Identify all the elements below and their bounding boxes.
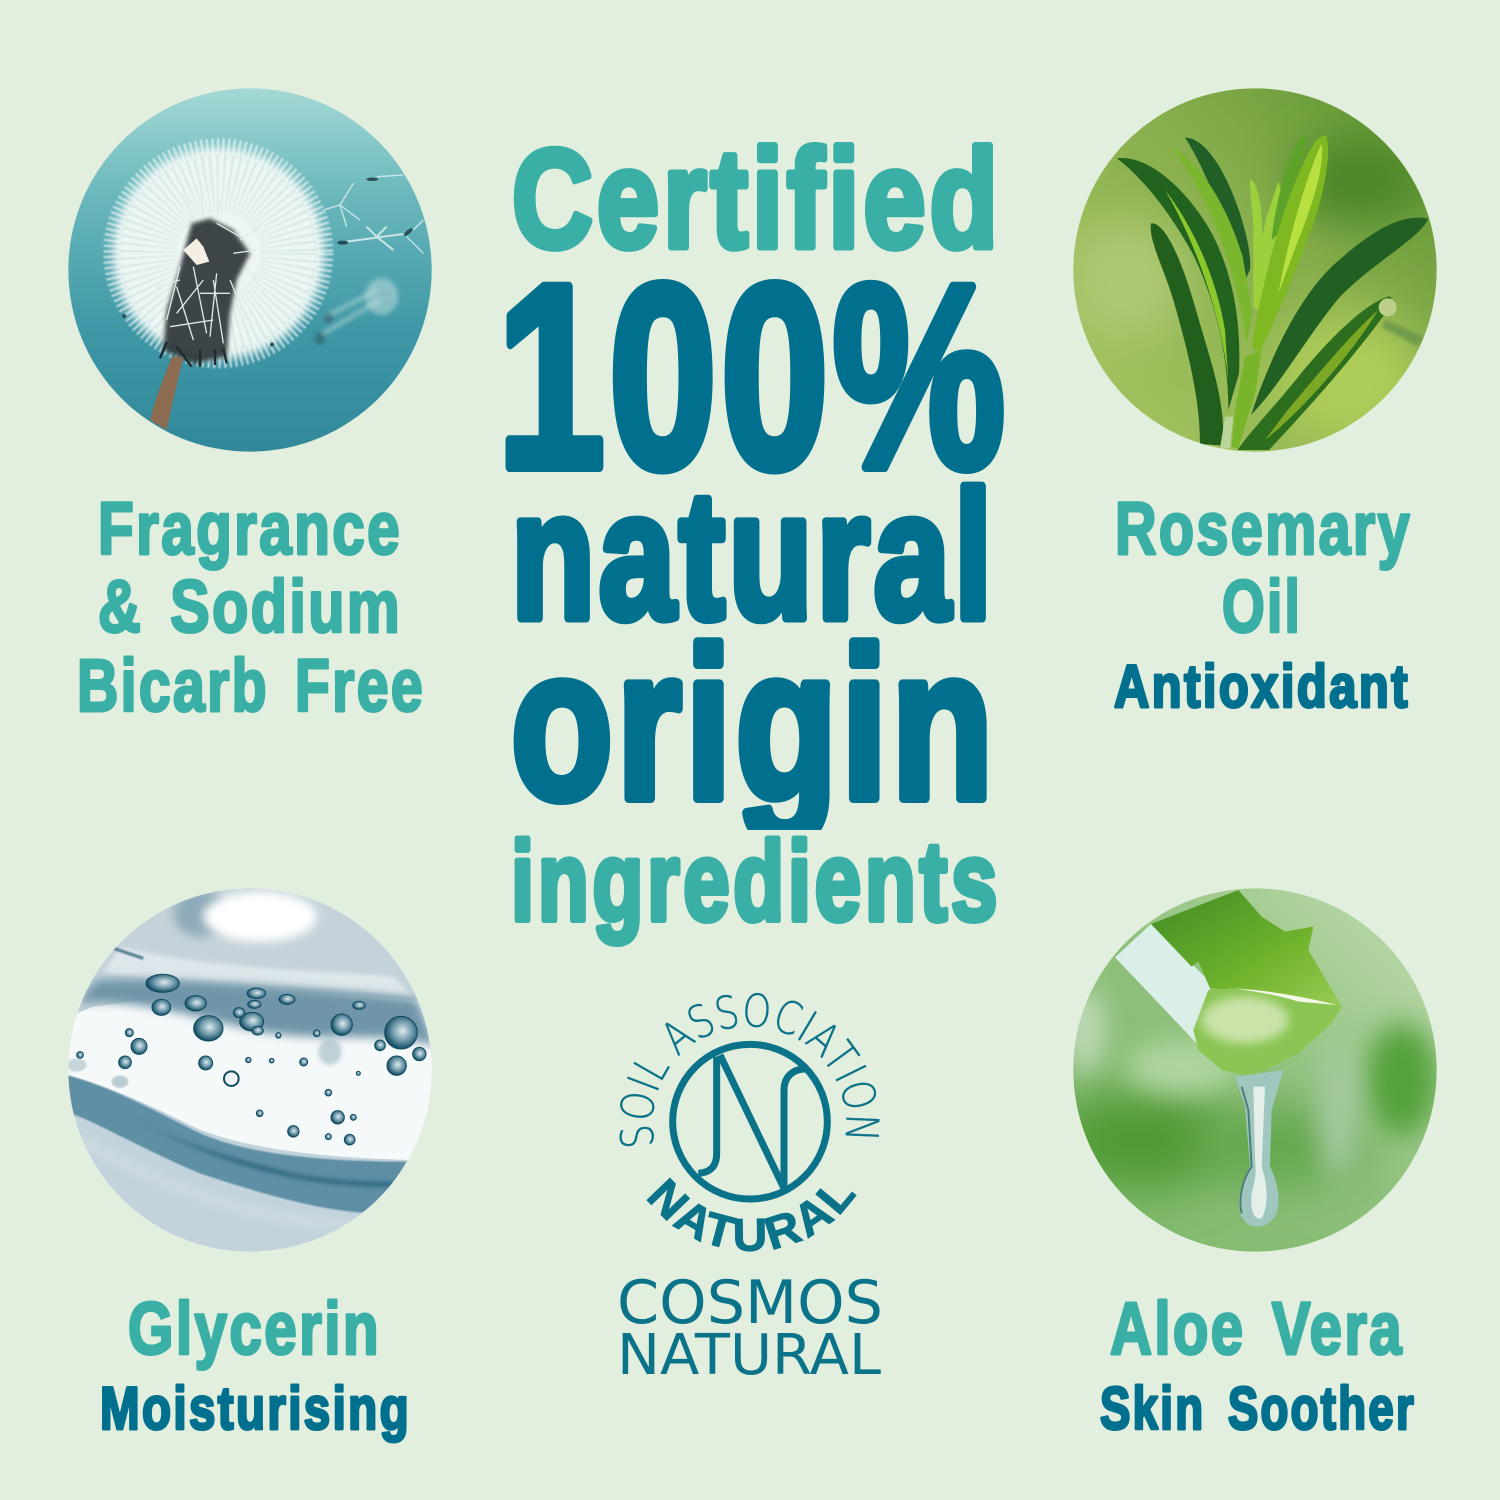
logo text: cosmos natural: NATURAL (617, 1323, 881, 1388)
logo: soil association natural seal: NATURAL (646, 1178, 857, 1252)
label: glycerin moisturising: Moisturising (100, 1375, 411, 1442)
label: aloe vera skin soother: Aloe Vera (1110, 1287, 1404, 1370)
label: fragrance and sodium bicarb free: Fragrance (98, 487, 402, 570)
label: aloe vera skin soother (1100, 1287, 1416, 1442)
title: natural: natural (511, 453, 996, 657)
photo: rosemary (1062, 80, 1445, 460)
title: ingredients: ingredients (511, 819, 1001, 944)
label: fragrance and sodium bicarb free: & Sodium (98, 565, 402, 648)
label: glycerin moisturising: Glycerin (128, 1287, 381, 1370)
logo: ring and N mark (673, 1044, 827, 1199)
title: origin: origin (511, 603, 997, 844)
logo: soil association natural seal: SOIL ASSOCIATION (619, 992, 880, 1146)
label: fragrance and sodium bicarb free: Bicarb Free (77, 644, 425, 727)
logo text: cosmos natural (617, 1268, 883, 1388)
label: glycerin moisturising (100, 1287, 411, 1442)
label: rosemary oil antioxidant (1114, 487, 1412, 720)
label: rosemary oil antioxidant: Oil (1222, 565, 1302, 648)
label: rosemary oil antioxidant: Antioxidant (1114, 653, 1410, 720)
label: rosemary oil antioxidant: Rosemary (1115, 487, 1412, 570)
label: fragrance and sodium bicarb free (77, 487, 425, 727)
photo: dandelion (60, 80, 440, 460)
logo: soil association natural seal (619, 992, 880, 1252)
logo text: cosmos natural: COSMOS (617, 1268, 883, 1338)
title: Certified: Certified (512, 120, 1002, 277)
photo: glycerin gel (60, 880, 440, 1260)
photo: aloe vera (1073, 888, 1437, 1252)
title: 100%: 100% (497, 230, 1009, 523)
